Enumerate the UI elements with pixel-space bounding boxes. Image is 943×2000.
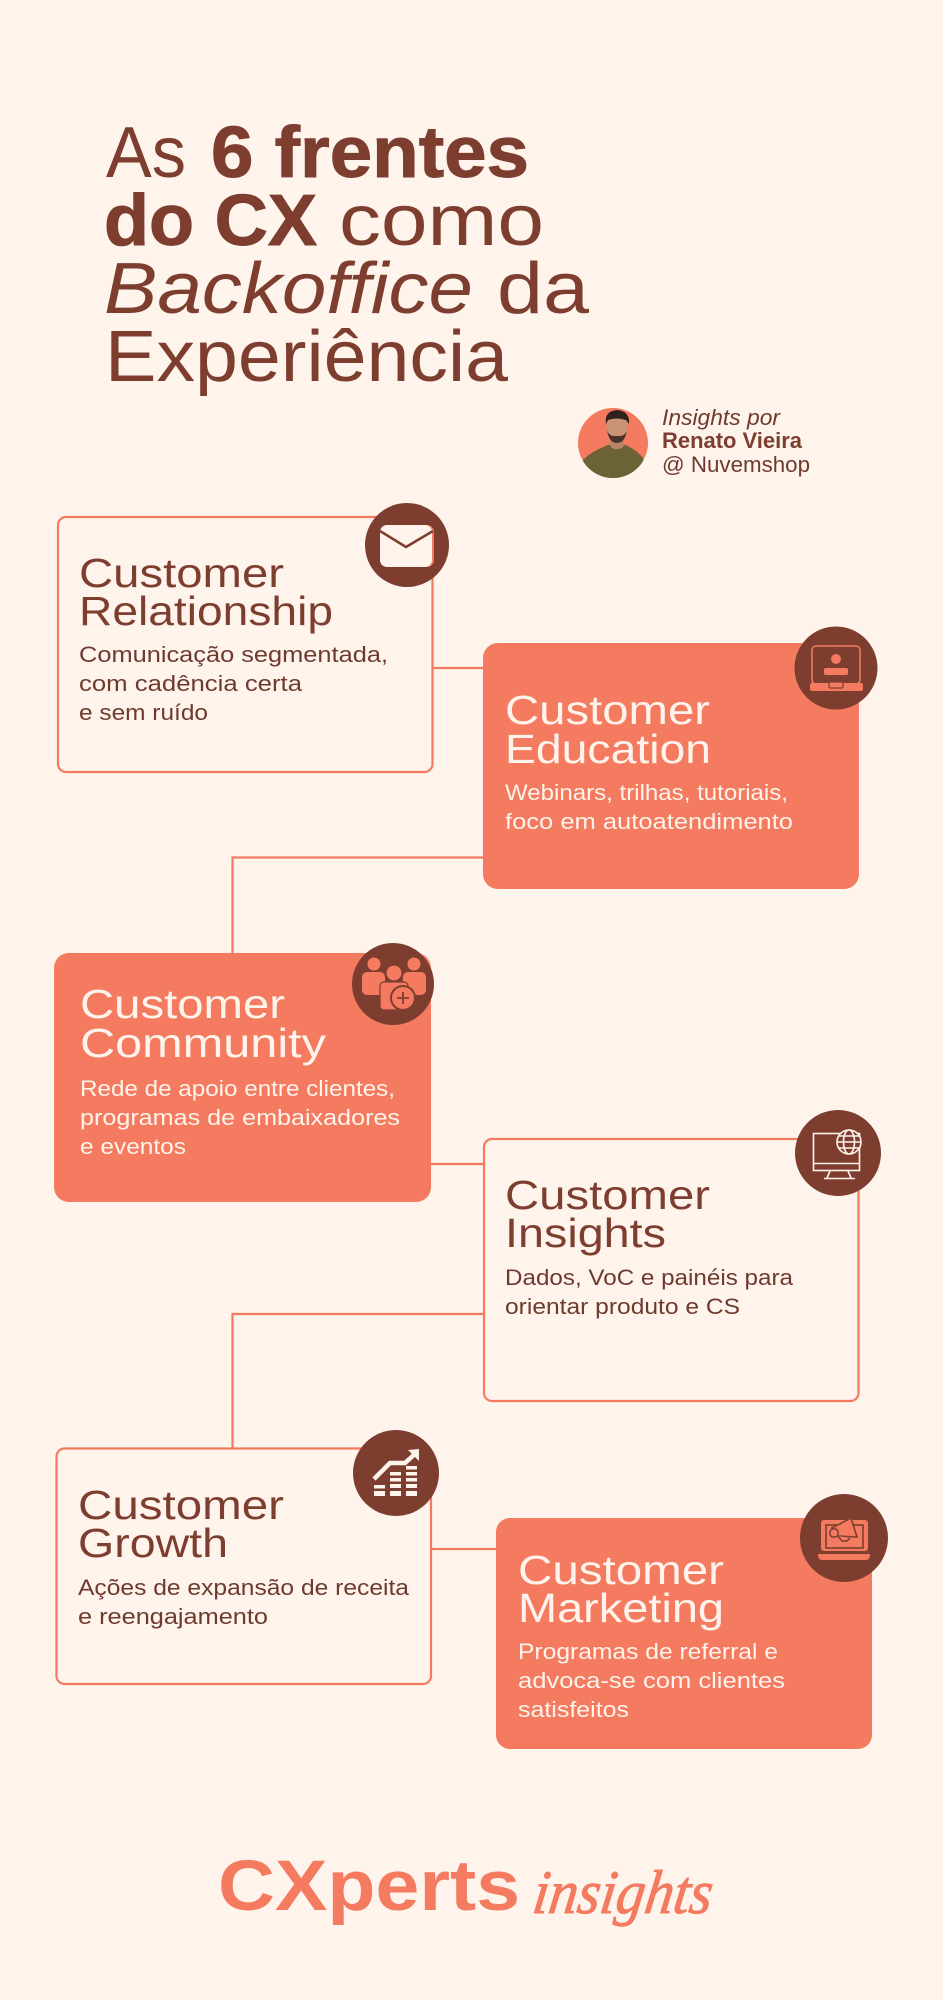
- heading: Customer Marketing: Marketing: [518, 1585, 724, 1631]
- icon: laptop with megaphone: [800, 1494, 888, 1582]
- connector: insights to growth: [232, 1314, 484, 1448]
- heading: Customer Insights: Customer: [505, 1172, 710, 1218]
- panel: Customer Insights: [484, 1110, 881, 1401]
- description: Customer Growth: e reengajamento: [78, 1604, 268, 1629]
- title: 6 frentes: [211, 113, 529, 193]
- heading: Customer Growth: [78, 1482, 284, 1566]
- description: Customer Growth: [78, 1575, 410, 1629]
- description: Customer Education: [505, 780, 793, 834]
- description: Customer Growth: Ações de expansão de receita: [78, 1575, 410, 1600]
- heading: Customer Insights: [505, 1172, 710, 1256]
- panel: Customer Growth: [56, 1430, 439, 1684]
- logo: CXperts insights: [218, 1847, 718, 1927]
- description: Customer Community: e eventos: [80, 1134, 186, 1159]
- panel: Customer Relationship: [58, 503, 449, 772]
- heading: Customer Education: Education: [505, 726, 711, 772]
- description: Customer Education: foco em autoatendimento: [505, 809, 793, 834]
- description: Customer Insights: [505, 1265, 794, 1319]
- connector: growth to marketing: [432, 1548, 497, 1550]
- logo: CXperts insights: CXperts: [218, 1847, 520, 1926]
- description: Customer Marketing: Programas de referral e: [518, 1639, 778, 1664]
- heading: Customer Relationship: Customer: [79, 550, 284, 596]
- title: As: [106, 113, 186, 193]
- panel: Customer Education: [483, 626, 878, 889]
- description: Customer Relationship: com cadência certa: [79, 671, 303, 696]
- title: como: [339, 181, 544, 261]
- icon: envelope: [365, 503, 449, 587]
- description: Customer Insights: orientar produto e CS: [505, 1294, 740, 1319]
- title: da: [497, 249, 590, 329]
- heading: Customer Community: Community: [80, 1020, 327, 1066]
- description: Customer Relationship: Comunicação segmentada,: [79, 642, 388, 667]
- title: do CX: [104, 181, 317, 261]
- description: Customer Marketing: [518, 1639, 785, 1722]
- description: Customer Relationship: [79, 642, 388, 725]
- author text: @ Nuvemshop: [662, 452, 810, 477]
- icon: community people: [352, 943, 434, 1025]
- title: Backoffice: [104, 249, 473, 329]
- title: [104, 113, 590, 397]
- panel: Customer Marketing: [496, 1494, 888, 1749]
- description: Customer Community: Rede de apoio entre clientes,: [80, 1076, 395, 1101]
- description: Customer Relationship: e sem ruído: [79, 700, 208, 725]
- heading: Customer Education: [505, 687, 711, 772]
- logo: CXperts insights: insights: [529, 1858, 718, 1927]
- connector: education to community: [232, 858, 483, 953]
- heading: Customer Community: Customer: [80, 981, 285, 1027]
- icon: laptop with person: [794, 626, 878, 710]
- description: Customer Insights: Dados, VoC e painéis para: [505, 1265, 794, 1290]
- title: Experiência: [105, 317, 509, 397]
- description: Customer Marketing: satisfeitos: [518, 1697, 629, 1722]
- connector: community to insights: [431, 1163, 484, 1165]
- author photo: [578, 408, 648, 480]
- heading: Customer Marketing: Customer: [518, 1547, 724, 1593]
- description: Customer Community: [80, 1076, 400, 1159]
- description: Customer Community: programas de embaixadores: [80, 1105, 400, 1130]
- heading: Customer Marketing: [518, 1547, 724, 1631]
- heading: Customer Relationship: [79, 550, 333, 634]
- heading: Customer Community: [80, 981, 327, 1066]
- connector: relationship to education: [433, 667, 483, 669]
- author text: Renato Vieira: [662, 428, 803, 453]
- panel: Customer Community: [54, 943, 434, 1202]
- heading: Customer Education: Customer: [505, 687, 710, 733]
- icon: monitor with globe: [795, 1110, 881, 1196]
- author text: [662, 405, 810, 477]
- heading: Customer Growth: Growth: [78, 1520, 228, 1566]
- heading: Customer Insights: Insights: [505, 1210, 666, 1256]
- description: Customer Marketing: advoca-se com clientes: [518, 1668, 785, 1693]
- author text: Insights por: [662, 405, 782, 430]
- heading: Customer Relationship: Relationship: [79, 588, 333, 634]
- icon: growth chart: [353, 1430, 439, 1516]
- heading: Customer Growth: Customer: [78, 1482, 284, 1528]
- author credit: [578, 405, 810, 480]
- description: Customer Education: Webinars, trilhas, tutoriais,: [505, 780, 788, 805]
